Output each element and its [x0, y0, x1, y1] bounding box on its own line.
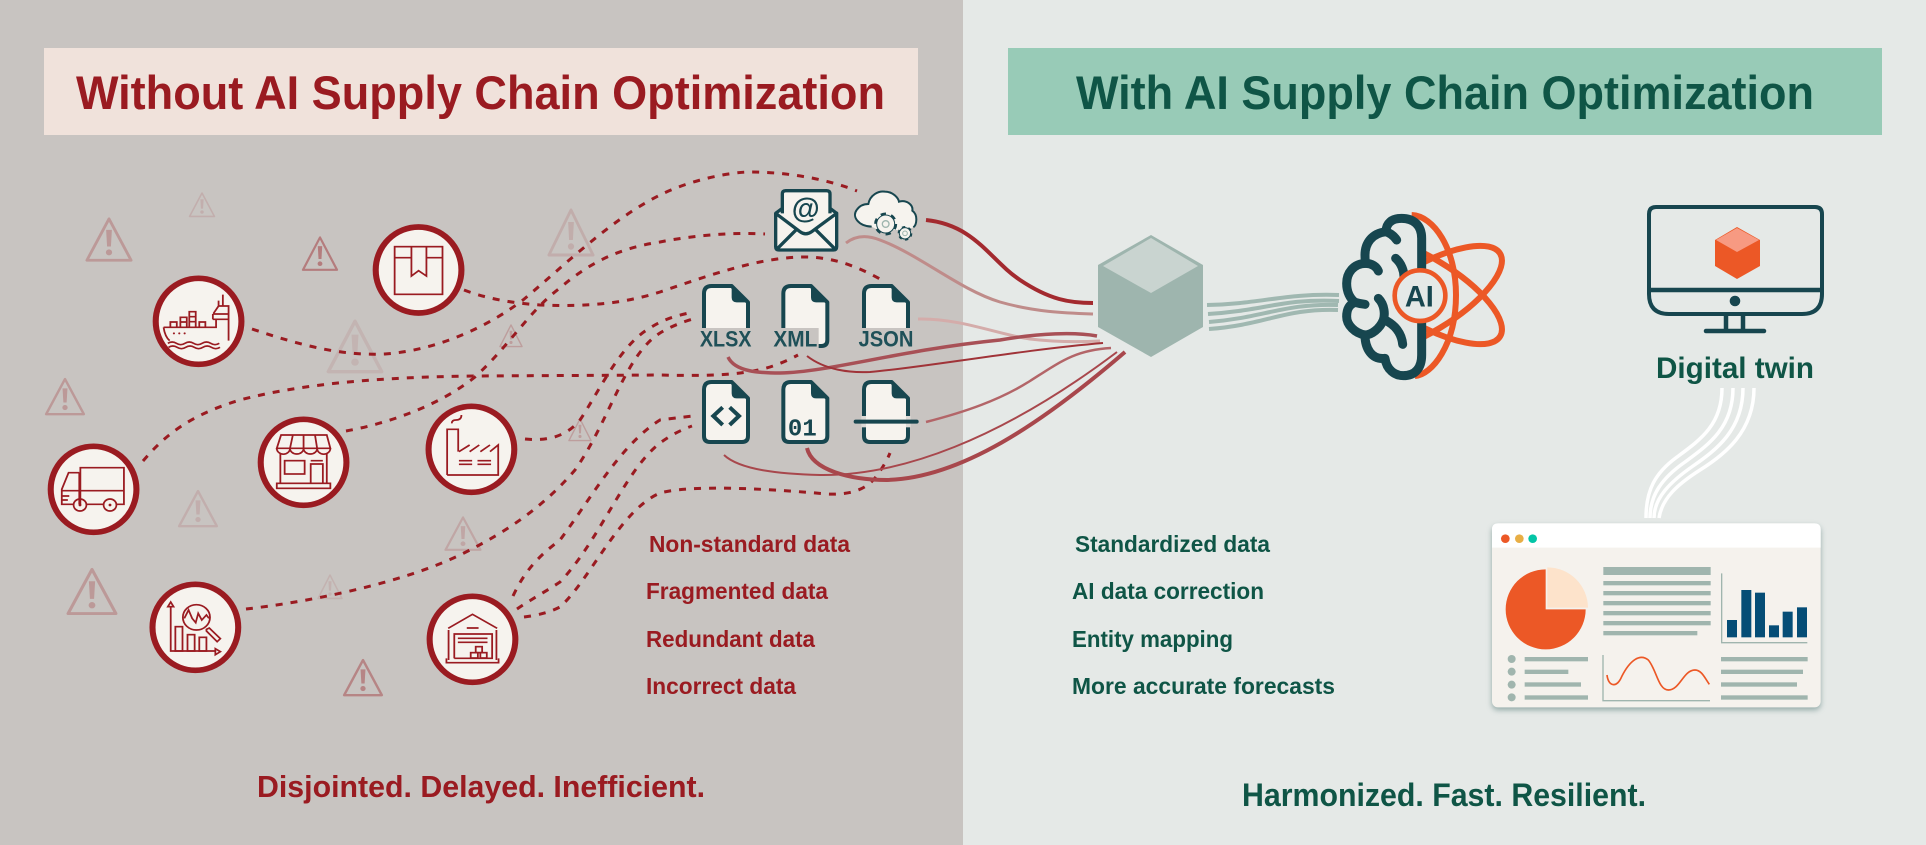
right text lines — [1721, 657, 1808, 700]
icon: JSON file: JSON — [858, 327, 913, 352]
solid streams from data files into the cube — [724, 220, 1125, 480]
text block: data problems: Redundant data — [646, 626, 815, 652]
heading: without AI: Without AI Supply Chain Optimization — [76, 66, 885, 119]
icon: warning 8 — [446, 517, 480, 550]
icon: cloud with gears — [855, 192, 916, 240]
icon: warning 6 — [500, 325, 522, 347]
window controls — [1501, 534, 1537, 543]
icon: XML file: XML — [773, 327, 817, 352]
icon: truck — [51, 446, 136, 532]
icon: email envelope — [776, 191, 837, 250]
panel: with AI background — [963, 0, 1926, 845]
line chart — [1603, 655, 1710, 701]
text block: data problems: Incorrect data — [646, 673, 796, 699]
heading: without AI — [44, 48, 918, 135]
icon: AI brain with atom — [1329, 215, 1517, 376]
icon: warning 2 — [190, 193, 214, 216]
icon: warning 5 — [46, 379, 84, 414]
heading: with AI: With AI Supply Chain Optimization — [1076, 66, 1814, 119]
stream: digital twin to dashboard — [1646, 388, 1754, 518]
dashboard card — [1492, 523, 1821, 710]
text lines — [1603, 567, 1711, 635]
icon: code file — [704, 382, 748, 442]
icon: store — [261, 419, 346, 505]
icon: warning 12 — [549, 210, 593, 255]
stream: cube to AI brain — [1207, 295, 1339, 329]
icon: binary file — [783, 382, 827, 444]
bullet list — [1508, 655, 1588, 701]
heading: with AI — [1008, 48, 1882, 135]
icon: XML file — [773, 286, 827, 352]
icon: warning 4 — [328, 321, 382, 372]
bar chart — [1722, 573, 1807, 643]
text block: benefits: Standardized data — [1075, 531, 1270, 557]
icon: warning 13 — [569, 419, 591, 441]
icon: XLSX file: XLSX — [700, 327, 752, 352]
dotted connections from sources to data files — [143, 172, 890, 617]
text block: data problems: Non-standard data — [649, 531, 850, 557]
icon: XLSX file — [699, 286, 753, 352]
text block: benefits: AI data correction — [1072, 578, 1264, 604]
icon: data cube — [1098, 235, 1203, 357]
icon: binary file: 01 — [788, 417, 817, 444]
text block: benefits: More accurate forecasts — [1072, 673, 1335, 699]
text block: benefits — [1072, 531, 1335, 699]
warning triangles — [46, 193, 593, 695]
label: digital twin: Digital twin — [1656, 352, 1814, 385]
icon: warning 1 — [87, 219, 131, 260]
icon: JSON file — [857, 286, 914, 352]
tagline: without AI: Disjointed. Delayed. Inefficient. — [257, 769, 705, 804]
icon: warehouse — [430, 596, 515, 682]
icon: analytics — [152, 584, 238, 670]
text block: data problems: Fragmented data — [646, 578, 828, 604]
tagline: with AI: Harmonized. Fast. Resilient. — [1242, 777, 1646, 813]
icon: package — [376, 227, 461, 313]
icon: monitor with cube — [1649, 207, 1822, 331]
icon: ship — [156, 278, 241, 364]
icon: warning 7 — [179, 491, 217, 526]
icon: warning 11 — [344, 660, 382, 695]
panel: without AI background — [0, 0, 963, 845]
icon: warning 3 — [303, 237, 337, 270]
icon: warning 10 — [318, 575, 342, 598]
pie chart — [1506, 567, 1588, 649]
icon: scanned file — [856, 382, 917, 442]
text block: data problems — [646, 531, 850, 699]
icon: AI brain with atom: AI — [1405, 281, 1434, 314]
icon: email envelope: @ — [792, 193, 820, 225]
icon: factory — [429, 406, 514, 492]
icon: warning 9 — [68, 569, 116, 614]
text block: benefits: Entity mapping — [1072, 626, 1233, 652]
